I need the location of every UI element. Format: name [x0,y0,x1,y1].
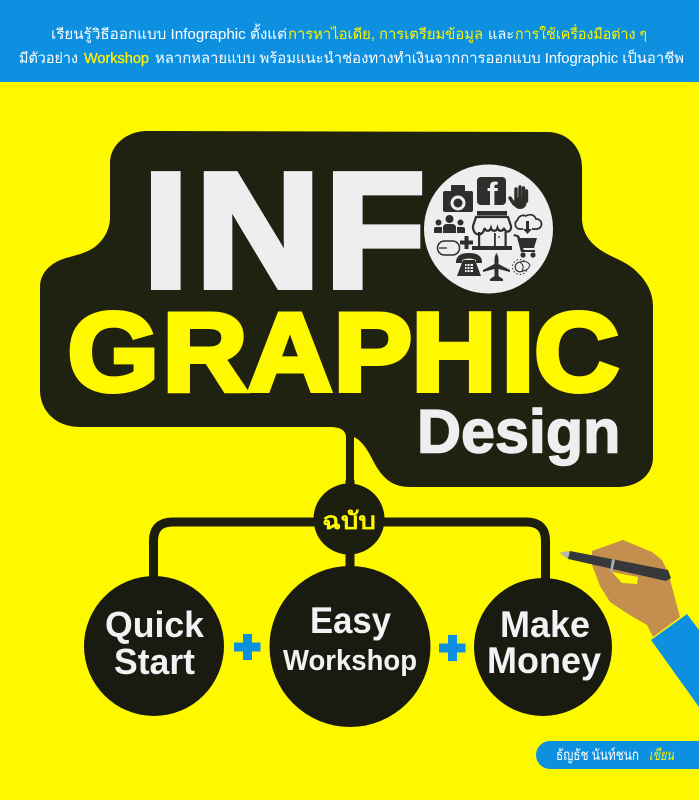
icon: telephone [456,253,482,276]
node: Make Money [474,578,612,716]
header line 1 [51,23,647,43]
header line 2: หลากหลายแบบ พร้อมแนะนำช่องทางทำเงินจากการออกแบบ Infographic เป็นอาชีพ [155,48,684,67]
finger gap [612,572,638,584]
node: Quick Start: Quick [105,604,205,645]
header line 1: การหาไอเดีย, การเตรียมข้อมูล [288,25,483,43]
node: ฉบับ: ฉบับ [322,508,376,535]
icon: people [434,215,465,233]
node: Easy Workshop: Workshop [283,645,417,677]
icon: cloud download [515,215,542,234]
node: Make Money: Money [487,640,601,681]
header line 2: มีตัวอย่าง [19,50,78,67]
icon: facebook: f [487,176,498,212]
icon circle [424,164,553,294]
title panel: black speech blob [40,131,653,487]
icon: camera [443,185,473,212]
icon: plus [460,236,473,249]
author pill [536,741,699,769]
hand [592,540,680,637]
illustration: hand with pen [560,540,699,707]
sleeve [651,614,699,707]
title word: INF: F [325,139,425,322]
node: Quick Start: Start [114,641,195,682]
pen [560,551,671,581]
header line 2: Workshop [84,51,149,67]
connector lines [154,480,546,600]
icon: computer mouse [438,241,460,255]
node: ฉบับ [314,484,384,554]
header line 2 [19,48,684,67]
node: Make Money: Make [500,604,590,645]
node: Quick Start [84,576,224,716]
title word: Design: Design [417,397,620,465]
header band [0,0,699,82]
icon: storefront [472,211,512,250]
icon: shopping cart [514,234,537,258]
node: Easy Workshop [270,566,430,727]
title word: GRAPHIC: GRAPHIC [68,291,619,415]
icon: airplane [483,253,510,281]
header line 1: การใช้เครื่องมือต่าง ๆ [515,24,647,43]
header line 1: เรียนรู้วิธีออกแบบ Infographic ตั้งแต่ [51,23,287,43]
title word: INF [143,139,425,322]
plus sign 2 [439,635,466,661]
icon: sun and cloud [512,260,530,274]
node: Easy Workshop: Easy [310,600,391,641]
title word: INF: N [195,139,321,322]
author pill: เขียน [649,747,675,764]
author pill: ธัญธัช นันท์ชนก [556,747,639,764]
title word: INF: I [143,139,189,322]
icon: hand [510,187,526,209]
header line 1: และ [488,27,514,43]
plus sign 1 [234,634,260,660]
